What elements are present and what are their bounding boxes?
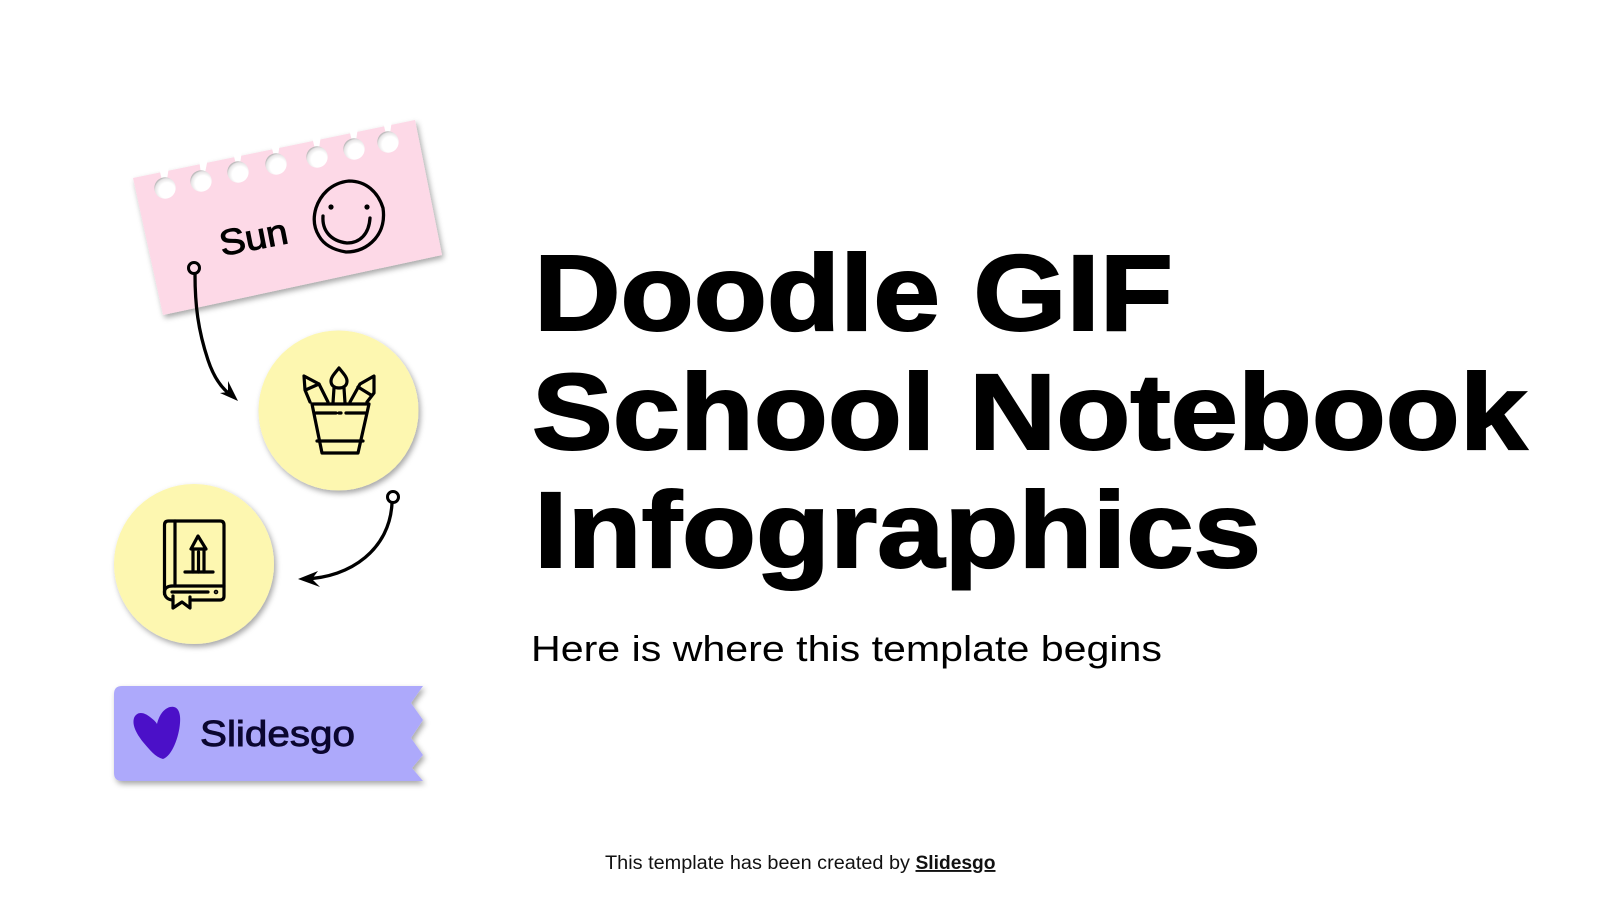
torn notebook note: Sun	[133, 120, 442, 315]
footer credit: Slidesgo	[916, 853, 996, 874]
icon: purple heart	[133, 707, 180, 759]
label: Slidesgo: Slidesgo	[200, 713, 355, 754]
title: Doodle GIF	[534, 232, 1173, 353]
arrow: note to pencil pot	[188, 262, 238, 401]
footer credit: This template has been created by	[605, 853, 911, 874]
icon: hand-drawn smiley	[314, 181, 384, 252]
arrow: pencil pot to notebook	[298, 492, 398, 587]
icon: book with pencil	[164, 521, 224, 608]
tape strip	[114, 686, 423, 781]
circle: pencil pot	[258, 330, 418, 490]
note paper	[133, 120, 442, 315]
binder holes	[154, 120, 399, 199]
circle: notebook	[114, 484, 274, 644]
label: Sun: Sun	[216, 210, 291, 264]
title: School Notebook	[532, 351, 1528, 472]
subtitle: Here is where this template begins	[531, 628, 1162, 669]
title	[532, 232, 1528, 590]
icon: pot of brushes	[304, 368, 374, 453]
title: Infographics	[534, 469, 1261, 590]
washi tape label: Slidesgo	[114, 686, 423, 781]
